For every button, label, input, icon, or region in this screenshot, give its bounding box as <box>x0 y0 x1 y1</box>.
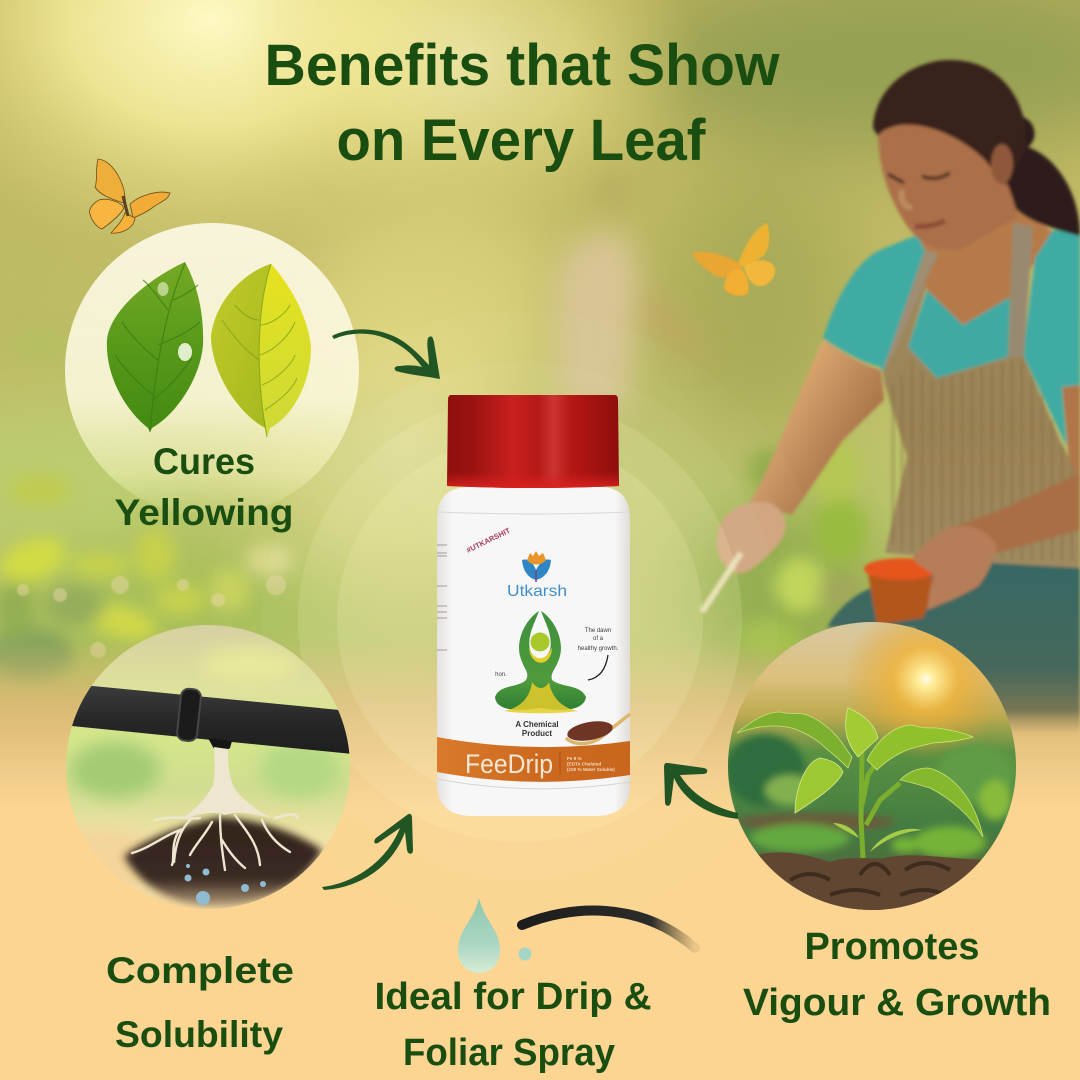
band small text: Fe 8 % <box>567 756 582 761</box>
arrow: growth panel to bottle <box>664 763 738 819</box>
small handwritten tagline: healthy growth. <box>578 646 619 652</box>
chemical product text: A Chemical <box>515 720 559 729</box>
leaf: lower right <box>900 768 983 837</box>
emitter <box>208 738 232 750</box>
pipe <box>58 684 352 754</box>
label: Vigour & Growth <box>743 982 1051 1024</box>
yoga figure logo <box>495 611 586 713</box>
gardener woman <box>702 60 1080 735</box>
soil mound <box>124 817 322 906</box>
small handwritten tagline <box>578 628 619 652</box>
hair ponytail <box>1003 115 1080 236</box>
label: Cures <box>153 441 255 482</box>
panel: promotes vigour and growth <box>720 597 1051 1024</box>
product bottle <box>437 395 630 816</box>
label: Promotes <box>804 926 980 968</box>
icon: drip pipe <box>522 911 695 948</box>
water drops <box>158 282 168 296</box>
legs <box>827 562 1080 735</box>
bokeh dots <box>17 575 286 658</box>
label: Complete <box>106 950 294 991</box>
apron <box>883 223 1080 568</box>
panel: complete solubility <box>40 620 360 1055</box>
band small text: (100 % Water Soluble) <box>567 767 615 772</box>
small handwritten tagline: of a <box>593 636 604 642</box>
leaf: small left <box>795 758 843 813</box>
background: blurred distant figure <box>556 168 702 405</box>
bottle body <box>437 487 630 816</box>
panel: ideal for drip and foliar spray <box>374 898 695 1074</box>
hair <box>873 60 1025 185</box>
cap lower rim highlight <box>447 472 619 488</box>
pipe joint <box>176 688 202 742</box>
hashtag: #UTKARSHIT <box>465 526 512 555</box>
pot body <box>868 575 938 625</box>
right upper arm skin <box>1062 385 1080 480</box>
icon: green leaf <box>107 262 203 432</box>
left arm <box>750 340 884 515</box>
label <box>106 950 294 1055</box>
shirt left side and sleeve <box>823 235 937 372</box>
water drops in soil <box>184 864 266 905</box>
nose shade <box>901 190 912 208</box>
label: Foliar Spray <box>403 1032 615 1074</box>
soil <box>755 852 985 910</box>
right apron strap <box>1008 223 1033 358</box>
panel: cures yellowing <box>65 223 359 533</box>
shirt right side <box>1023 230 1080 447</box>
mouth <box>915 221 945 226</box>
concentric glow rings behind product <box>210 310 830 930</box>
title: Benefits that Show <box>264 33 780 98</box>
label: Yellowing <box>114 492 294 533</box>
icon: butterfly left <box>89 159 170 233</box>
brand logo <box>522 551 551 582</box>
spoon with powder <box>566 714 630 744</box>
neck and chest <box>920 200 1052 325</box>
face <box>878 124 1018 250</box>
chemical product text: Product <box>522 729 552 738</box>
roots <box>180 747 275 820</box>
brand name: Utkarsh <box>507 583 567 600</box>
leaf: low sprouts <box>833 823 922 852</box>
panel backdrop circle <box>65 223 359 517</box>
label <box>114 441 294 533</box>
small handwritten tagline: The dawn <box>585 628 611 634</box>
band small text: (EDTA Chelated <box>567 762 601 766</box>
leaf: top centre <box>846 708 878 757</box>
product name: FeeDrip <box>465 749 553 779</box>
pot rim <box>864 558 940 580</box>
left apron strap <box>883 250 937 370</box>
label: Ideal for Drip & <box>374 976 652 1018</box>
side print text <box>437 545 447 650</box>
icon: butterfly right <box>692 223 775 296</box>
eyes <box>888 173 950 183</box>
chemical product text <box>515 720 559 738</box>
leaf: large left <box>737 712 852 768</box>
hand <box>717 502 786 573</box>
arrow: drip panel to bottle <box>322 814 413 890</box>
icon: water drop <box>458 898 500 973</box>
hand on pot <box>913 526 997 610</box>
garden scene <box>728 622 1016 910</box>
small word: hon. <box>495 672 507 678</box>
label <box>374 976 652 1074</box>
band divider <box>559 752 561 775</box>
icon: small droplet <box>518 948 532 960</box>
band lower seam <box>437 779 630 789</box>
icon: yellowing leaf <box>211 264 311 437</box>
ear <box>991 144 1013 184</box>
apron stripes <box>893 360 1072 560</box>
band small text <box>567 756 615 772</box>
drip scene <box>66 625 350 909</box>
small curved arrow <box>588 655 608 680</box>
title <box>264 33 780 173</box>
arrow: leaf panel to bottle <box>332 329 440 379</box>
title: on Every Leaf <box>336 108 706 173</box>
foliage blotches <box>0 327 866 683</box>
shirt centre <box>908 290 1010 378</box>
bottle cap <box>447 395 619 488</box>
right arm <box>945 473 1080 553</box>
label: Solubility <box>115 1014 283 1055</box>
leaf: right <box>867 725 973 770</box>
tool <box>702 553 741 612</box>
bottle label details <box>437 512 630 789</box>
label <box>743 926 1051 1024</box>
plant stem <box>861 752 900 858</box>
orange band <box>437 737 630 782</box>
